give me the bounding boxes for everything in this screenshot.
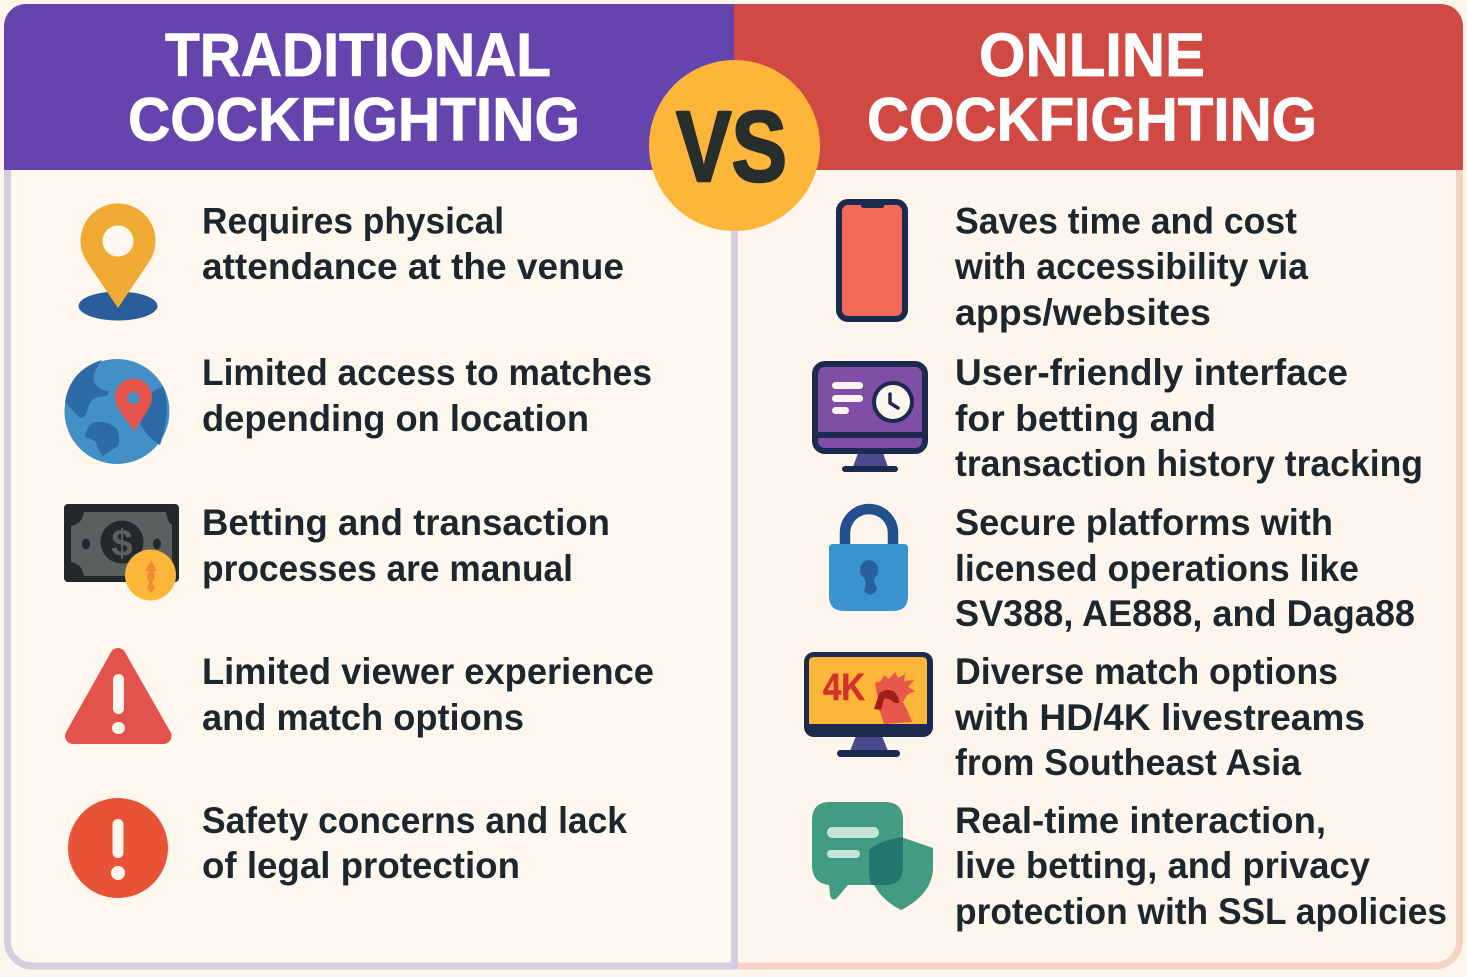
text: saves time [954,200,1308,333]
text: saves time: with accessibility via [954,246,1308,287]
icon: desktop dashboard [815,364,925,472]
icon: padlock [829,509,908,611]
icon: alert circle [68,798,168,898]
text: real-time: protection with SSL apolicies [955,891,1447,932]
text: real-time [955,800,1447,932]
icon: location pin [78,203,158,320]
icon: banknote with coin [64,504,179,600]
text: limited viewer: Limited viewer experience [202,651,654,692]
icon: banknote with coin: $ [111,523,133,565]
text: physical attendance: Requires physical [202,200,504,242]
icon: smartphone [839,202,905,319]
header: online [734,4,1463,170]
text: physical attendance: attendance at the venue [202,246,624,287]
text: manual betting [202,502,610,589]
rooster [874,672,915,724]
text: safety concerns [202,800,627,886]
panel: online [734,4,1463,966]
text: secure platforms: SV388, AE888, and Daga88 [955,593,1415,634]
text: limited viewer [202,651,654,738]
text: diverse match: from Southeast Asia [955,742,1301,783]
header: online: COCKFIGHTING [867,86,1317,154]
text: limited access [202,352,652,439]
text: limited viewer: and match options [202,697,524,738]
text: saves time: apps/websites [955,292,1211,333]
text: limited access: depending on location [202,398,589,439]
text: user-friendly [955,352,1423,484]
badge: VS: VS [676,91,787,203]
text: limited access: Limited access to matches [202,352,652,393]
icon: globe [64,359,170,464]
text: saves time: Saves time and cost [955,200,1297,242]
text: secure platforms: Secure platforms with [955,502,1333,543]
text: diverse match [954,651,1365,783]
text: manual betting: processes are manual [202,548,573,589]
header: traditional: TRADITIONAL [165,21,551,89]
text: secure platforms: licensed operations like [955,548,1359,589]
panel: traditional [4,4,734,966]
text: safety concerns: of legal protection [202,845,520,886]
text: diverse match: Diverse match options [955,651,1338,692]
text: real-time: Real-time interaction, [955,800,1326,841]
header: traditional: COCKFIGHTING [128,86,580,154]
text: user-friendly: transaction history tracking [955,443,1423,484]
icon: warning triangle [73,656,164,736]
icon: 4K monitor with rooster: 4K [823,667,865,709]
text: physical attendance [202,200,624,287]
text: user-friendly: User-friendly interface [955,352,1348,393]
text: user-friendly: for betting and [955,398,1216,439]
text: real-time: live betting, and privacy [955,845,1370,886]
icon: chat bubble and shield [812,802,933,910]
badge: VS [649,60,820,231]
header: online: ONLINE [979,21,1205,89]
header: traditional [4,4,734,170]
text: safety concerns: Safety concerns and lack [202,800,627,841]
text: manual betting: Betting and transaction [202,502,610,543]
text: secure platforms [955,502,1415,634]
icon: 4K monitor with rooster [804,652,933,757]
text: diverse match: with HD/4K livestreams [954,697,1365,738]
